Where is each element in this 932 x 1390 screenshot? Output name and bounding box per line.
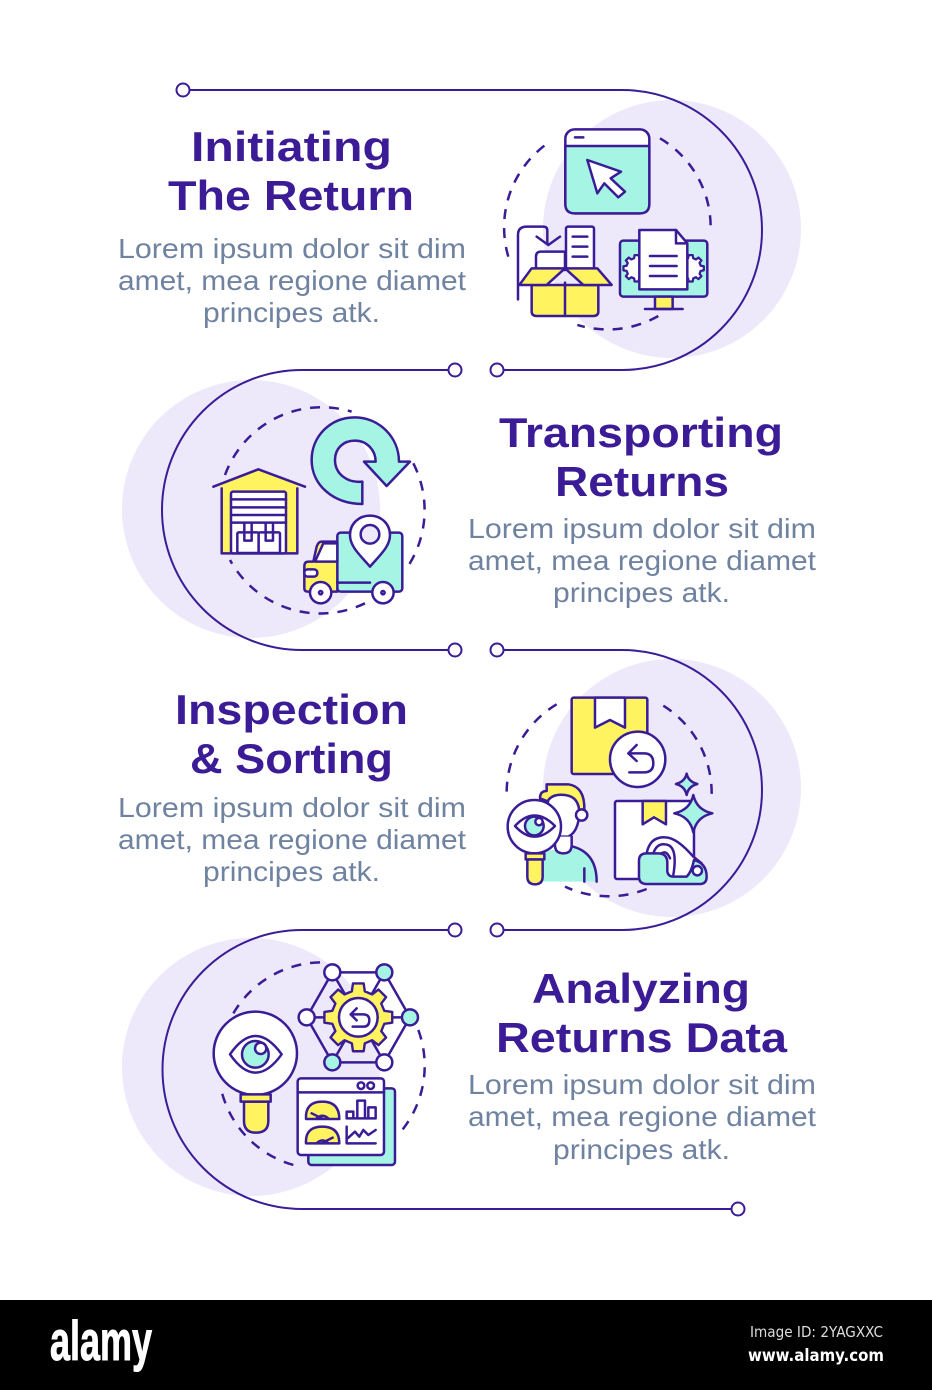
body text: step 3 (118, 792, 466, 887)
website: www.alamy.com (748, 1346, 884, 1366)
image id: Image ID: 2YAGXXC (750, 1323, 883, 1341)
icon: browser, parcel and computer document (504, 129, 711, 329)
footer logo: alamy (50, 1309, 152, 1372)
footer bar (0, 1300, 932, 1390)
background circle 4 (122, 938, 380, 1196)
heading: Inspection & Sorting: Inspection (175, 686, 408, 733)
heading: Initiating The Return (168, 123, 414, 219)
body text: step 2: amet, mea regione diamet (468, 545, 816, 576)
icon: returned parcel, inspector and sealed box (507, 698, 712, 896)
heading: Initiating The Return: The Return (168, 172, 414, 219)
background circle 1 (543, 100, 801, 358)
body text: step 4: principes atk. (553, 1134, 730, 1165)
body text: step 2 (468, 513, 816, 608)
heading: Inspection & Sorting (175, 686, 408, 782)
body text: step 3: Lorem ipsum dolor sit dim (118, 792, 466, 823)
background circle 2 (122, 380, 380, 638)
body text: step 4: Lorem ipsum dolor sit dim (468, 1069, 816, 1100)
body text: step 3: amet, mea regione diamet (118, 824, 466, 855)
heading: Transporting Returns: Transporting (499, 409, 783, 456)
connector line: step 1 (176, 84, 762, 376)
body text: step 1: amet, mea regione diamet (118, 265, 466, 296)
heading: Analyzing Returns Data: Analyzing (532, 965, 750, 1012)
body text: step 4 (468, 1069, 816, 1165)
body text: step 1 (118, 233, 466, 328)
connector line: step 4 (162, 924, 744, 1216)
heading: Analyzing Returns Data (496, 965, 788, 1061)
body text: step 1: Lorem ipsum dolor sit dim (118, 233, 466, 264)
icon: warehouse, return arrow and delivery truck (213, 407, 425, 613)
body text: step 2: principes atk. (553, 577, 730, 608)
body text: step 1: principes atk. (203, 297, 380, 328)
icon: magnifier, gear network and dashboard (214, 962, 425, 1165)
heading: Analyzing Returns Data: Returns Data (496, 1014, 788, 1061)
heading: Transporting Returns: Returns (555, 458, 729, 505)
heading: Inspection & Sorting: & Sorting (190, 735, 393, 782)
body text: step 2: Lorem ipsum dolor sit dim (468, 513, 816, 544)
body text: step 3: principes atk. (203, 856, 380, 887)
background circle 3 (543, 659, 801, 917)
body text: step 4: amet, mea regione diamet (468, 1101, 816, 1132)
heading: Transporting Returns (499, 409, 783, 505)
connector line: step 3 (490, 644, 762, 936)
connector line: step 2 (162, 364, 462, 656)
heading: Initiating The Return: Initiating (191, 123, 392, 170)
